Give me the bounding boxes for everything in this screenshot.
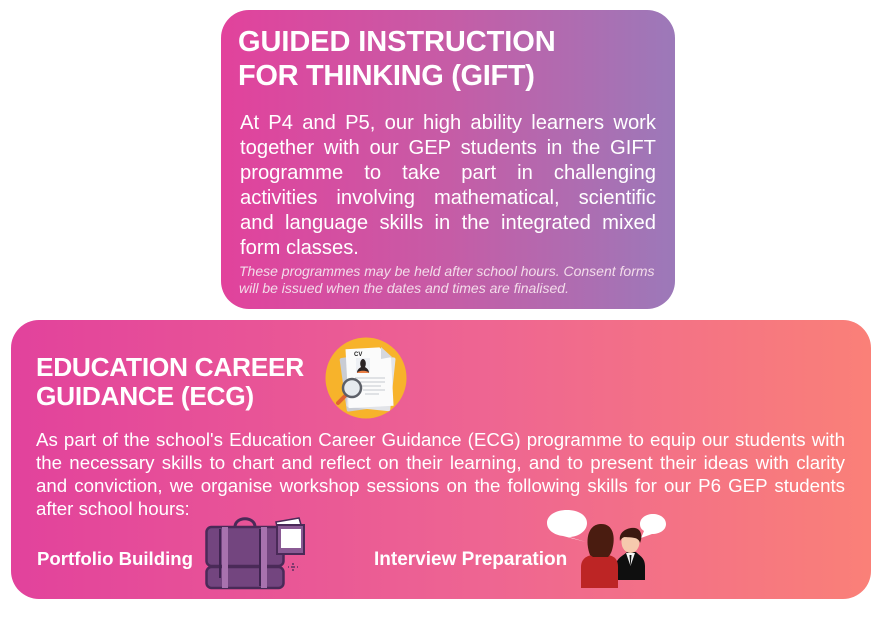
text block: ECG description: after school hours: <box>36 498 190 519</box>
note: consent forms: will be issued when the dates and times are finalised. <box>239 280 569 296</box>
text block: ECG description: and conviction, we organise workshop sessions on the following skills for our P6 GEP students <box>36 475 845 496</box>
panel: GIFT programme <box>221 10 675 309</box>
panel: Education Career Guidance <box>11 320 871 599</box>
label: Portfolio Building: Portfolio Building <box>37 548 193 569</box>
text block: GIFT description: and language skills in the integrated mixed <box>240 212 656 234</box>
icon: interview conversation <box>547 510 666 588</box>
text block: ECG description: the necessary skills to chart and reflect on their learning, and to present their ideas with clarity <box>36 452 845 473</box>
heading: ECG: GUIDANCE (ECG) <box>36 381 254 411</box>
heading: GIFT: GUIDED INSTRUCTION <box>238 26 556 58</box>
label: Interview Preparation: Interview Preparation <box>374 549 567 570</box>
text block: GIFT description: At P4 and P5, our high ability learners work <box>240 112 656 134</box>
note: consent forms: These programmes may be held after school hours. Consent forms <box>239 263 655 279</box>
text block: GIFT description: form classes. <box>240 237 359 259</box>
text block: GIFT description: together with our GEP students in the GIFT <box>240 137 656 159</box>
heading: GIFT <box>238 26 556 92</box>
icon: CV under magnifying glass: CV <box>354 352 362 358</box>
text block: GIFT description <box>240 112 656 259</box>
icon: CV under magnifying glass <box>326 338 406 418</box>
text block: GIFT description: activities involving mathematical, scientific <box>240 187 656 209</box>
text block: GIFT description: programme to take part in challenging <box>240 162 656 184</box>
heading: ECG <box>36 352 304 411</box>
text block: ECG description: As part of the school's Education Career Guidance (ECG) programme to equip our students with <box>36 429 845 450</box>
note: consent forms <box>239 263 655 296</box>
heading: ECG: EDUCATION CAREER <box>36 352 304 382</box>
heading: GIFT: FOR THINKING (GIFT) <box>238 60 535 92</box>
text block: ECG description <box>36 429 845 519</box>
icon: portfolio briefcase <box>205 517 305 590</box>
